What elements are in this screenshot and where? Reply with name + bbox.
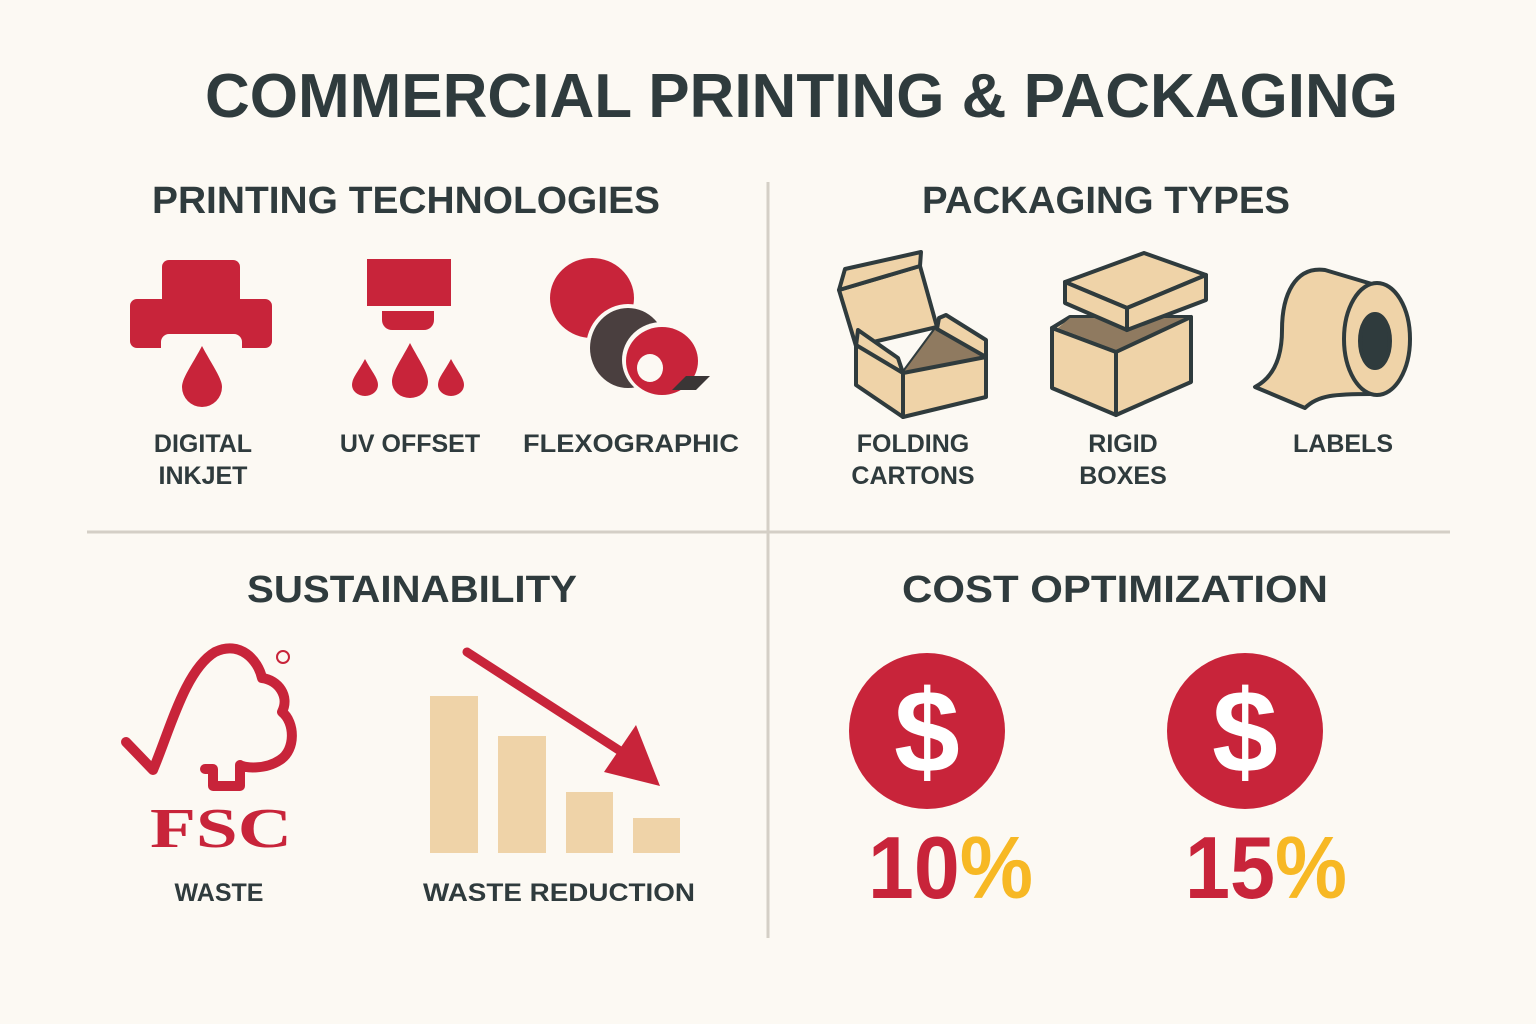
label: folding cartons: CARTONS	[851, 462, 975, 490]
icon: dollar coin 2: $	[1212, 666, 1278, 798]
stat: 15%: 15%	[1185, 818, 1347, 917]
heading: packaging types: PACKAGING TYPES	[922, 180, 1290, 222]
icon: labels roll	[1255, 270, 1410, 408]
stat: 10%: 10%	[868, 818, 1033, 917]
label: waste reduction: WASTE REDUCTION	[423, 879, 695, 907]
label: rigid boxes: BOXES	[1079, 462, 1167, 490]
panel: printing technologies	[130, 180, 739, 490]
label: rigid boxes: RIGID	[1088, 430, 1158, 458]
icon: digital inkjet	[130, 260, 272, 407]
icon: dollar coin 2	[1167, 653, 1323, 809]
title: COMMERCIAL PRINTING & PACKAGING	[205, 62, 1398, 131]
heading: printing technologies: PRINTING TECHNOLOGIES	[152, 180, 660, 222]
icon: dollar coin 1	[849, 653, 1005, 809]
label: labels: LABELS	[1293, 430, 1393, 458]
icon: rigid box	[1052, 253, 1206, 415]
label: flexographic: FLEXOGRAPHIC	[523, 430, 739, 458]
label: digital inkjet: INKJET	[159, 462, 247, 490]
heading: sustainability: SUSTAINABILITY	[247, 569, 577, 611]
panel: sustainability	[126, 569, 695, 907]
icon: uv offset	[352, 259, 464, 398]
chart: waste reduction bars	[430, 696, 680, 853]
panel: cost optimization	[849, 569, 1347, 917]
icon: folding carton	[839, 252, 986, 417]
label: digital inkjet: DIGITAL	[154, 430, 252, 458]
panel: packaging types	[839, 180, 1410, 490]
icon: fsc logo	[126, 648, 292, 860]
label: uv offset: UV OFFSET	[340, 430, 480, 458]
heading: cost optimization: COST OPTIMIZATION	[902, 569, 1328, 611]
label: folding cartons: FOLDING	[857, 430, 969, 458]
arrow: downward trend	[467, 652, 660, 786]
label: waste: WASTE	[175, 879, 263, 907]
icon: fsc logo: FSC	[150, 798, 292, 860]
icon: dollar coin 1: $	[894, 666, 960, 798]
icon: flexographic	[550, 258, 710, 398]
